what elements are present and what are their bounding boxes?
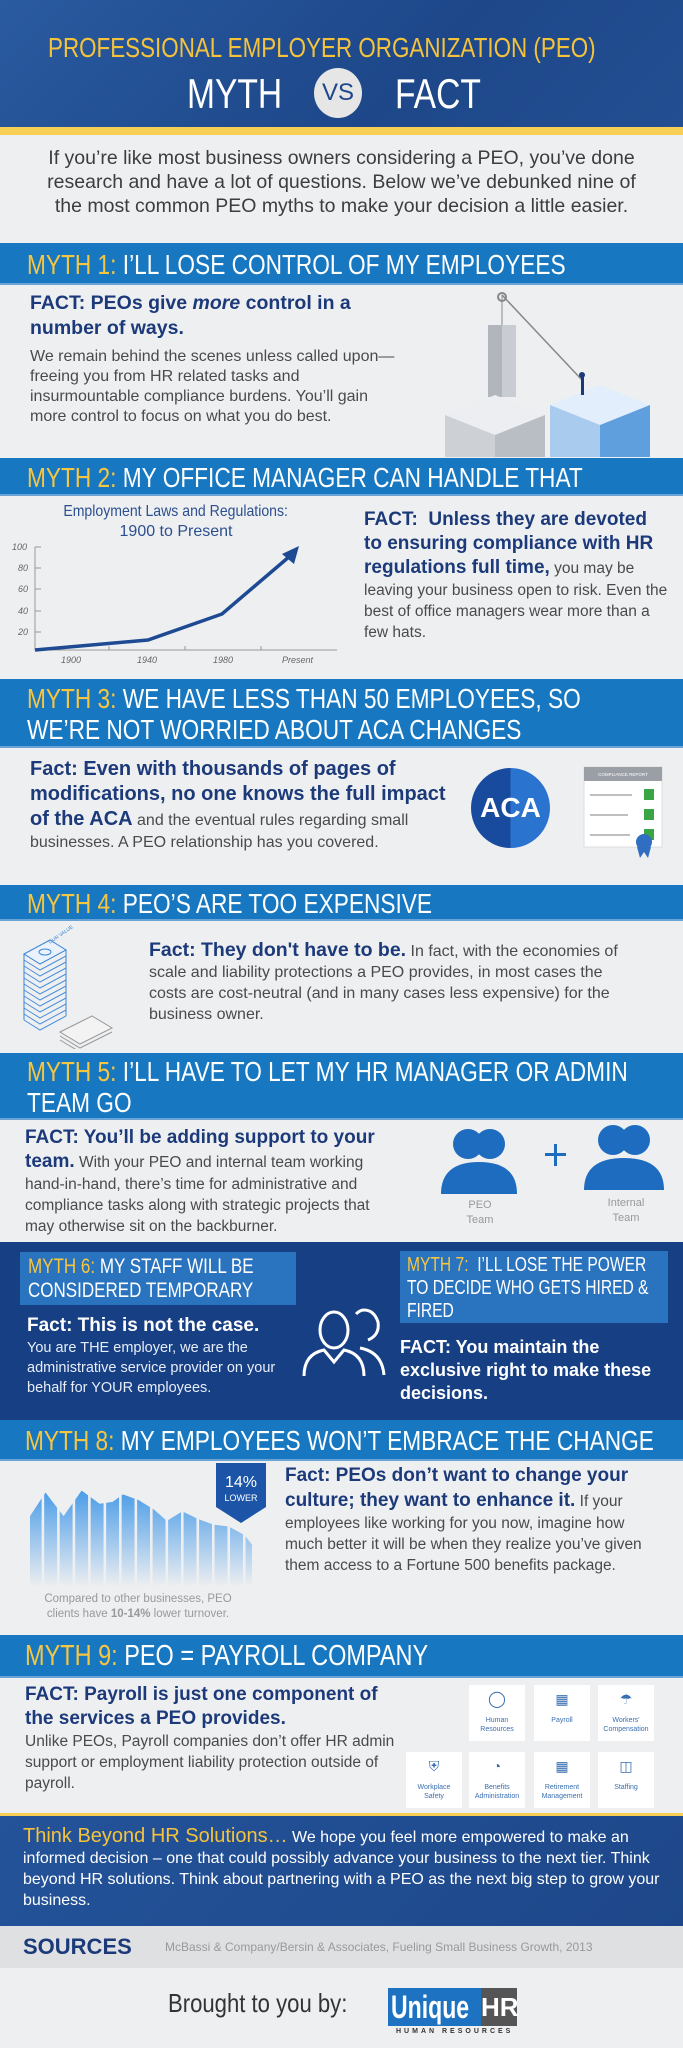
myth 8 header: MYTH 8: MY EMPLOYEES WON’T EMBRACE THE CHANGE	[25, 1425, 654, 1456]
myth 5 header	[0, 1053, 683, 1120]
myth vs fact: VS	[322, 79, 354, 106]
chart: employment laws: Employment Laws and Regulations:	[64, 503, 288, 520]
myth 9 fact	[25, 1684, 394, 1792]
myth 1 fact: FACT: PEOs give more control in a number of ways.	[30, 292, 351, 339]
myth 4 header: MYTH 4: PEO’S ARE TOO EXPENSIVE	[27, 888, 432, 919]
myth vs fact	[187, 68, 481, 118]
myth 2 header	[0, 458, 683, 496]
myth 6 fact	[27, 1315, 275, 1396]
chart: employment laws: 1900	[61, 655, 81, 665]
chart: turnover bars	[30, 1490, 252, 1582]
service tiles: Administration	[475, 1793, 519, 1800]
service tiles: ▦	[555, 1758, 569, 1774]
service tiles: Workers'	[612, 1717, 640, 1724]
closing panel: think beyond: Think Beyond HR Solutions… We hope you feel more empowered to make an informed decision – one that could possibly advance your business to the next tier. Think beyond HR solutions. Think about partnering with a PEO as the next big step to grow your business.	[23, 1825, 660, 1909]
badge: 14% lower	[216, 1463, 266, 1523]
icon: PEO team + internal team: Team	[467, 1214, 493, 1226]
myth 1 header: MYTH 1: I’LL LOSE CONTROL OF MY EMPLOYEES	[27, 249, 566, 280]
service tiles: Staffing	[614, 1784, 638, 1791]
badge: 14% lower: 14%	[225, 1474, 257, 1491]
icon: compliance report: COMPLIANCE REPORT	[598, 772, 648, 777]
chart: employment laws: 80	[18, 563, 28, 573]
myth 3 header: MYTH 3: WE HAVE LESS THAN 50 EMPLOYEES, SO	[27, 683, 581, 714]
sources: SOURCES	[23, 1934, 132, 1959]
myth 6 fact: You are THE employer, we are the administrative service provider on your behalf for YOUR employees.	[27, 1340, 275, 1396]
sources: McBassi & Company/Bersin & Associates, Fueling Small Business Growth, 2013	[165, 1940, 593, 1954]
service tiles: ⛨	[429, 1758, 439, 1774]
myth 7 header box	[400, 1251, 668, 1323]
chart: employment laws: 1980	[213, 655, 233, 665]
brought to you by: Brought to you by:	[168, 1988, 347, 2018]
logo: Unique HR	[388, 1988, 519, 2035]
icon: PEO team + internal team: Team	[613, 1212, 639, 1224]
myth 5 header: MYTH 5: I’LL HAVE TO LET MY HR MANAGER OR ADMIN	[27, 1056, 628, 1087]
myth 7 header box: TO DECIDE WHO GETS HIRED &	[407, 1277, 649, 1299]
service tiles	[406, 1685, 654, 1808]
myth 6 fact: Fact: This is not the case.	[27, 1315, 259, 1336]
service tiles: Safety	[424, 1793, 444, 1800]
service tiles: Human	[486, 1717, 508, 1724]
chart: employment laws: 40	[18, 606, 28, 616]
myth 3 header	[0, 679, 683, 748]
myth 6 header box	[20, 1252, 296, 1305]
header banner	[0, 0, 683, 127]
service tiles: ◫	[619, 1758, 633, 1774]
chart: employment laws: 20	[17, 627, 28, 637]
icon: PEO team + internal team: Internal	[608, 1197, 644, 1209]
myth 3 fact: Fact: Even with thousands of pages of modifications, no one knows the full impact of the ACA and the eventual rules regarding small businesses. A PEO relationship has you covered.	[30, 758, 446, 851]
myth 6 header box: MYTH 6: MY STAFF WILL BE	[28, 1255, 254, 1278]
sources	[0, 1926, 683, 1968]
service tiles: Payroll	[551, 1717, 573, 1724]
closing panel: think beyond	[0, 1813, 683, 1926]
icon: compliance report	[584, 766, 662, 858]
badge: 14% lower: LOWER	[224, 1493, 258, 1503]
service tiles: ▦	[555, 1691, 569, 1707]
myth 8 header	[0, 1420, 683, 1461]
chart: employment laws: 100	[12, 542, 27, 552]
myth 9 fact: FACT: Payroll is just one component of the services a PEO provides.	[25, 1684, 378, 1729]
chart: employment laws: 1940	[137, 655, 157, 665]
chart caption: Compared to other businesses, PEO clients have 10-14% lower turnover.	[44, 1593, 232, 1620]
service tiles: ◯	[488, 1691, 506, 1708]
logo: Unique HR: Unique	[391, 1989, 469, 2025]
service tiles: Retirement	[545, 1784, 579, 1791]
chart: employment laws: 1900 to Present	[120, 523, 232, 540]
myth 7 header box: MYTH 7: I’LL LOSE THE POWER	[407, 1254, 646, 1276]
myth 4 fact: Fact: They don't have to be. In fact, with the economies of scale and liability protections a PEO provides, in most cases the costs are cost-neutral (and in many cases less expensive) for the business owner.	[149, 939, 618, 1023]
icon: money stacks	[23, 924, 113, 1049]
logo: Unique HR: HR	[481, 1992, 519, 2022]
myth 9 fact: Unlike PEOs, Payroll companies don’t offer HR admin support or employment liability protection outside of payroll.	[25, 1733, 394, 1792]
icon: people outline	[302, 1308, 386, 1376]
icon: ACA circle: ACA	[480, 792, 541, 823]
myth 9 header	[0, 1635, 683, 1678]
myth 3 header: WE’RE NOT WORRIED ABOUT ACA CHANGES	[27, 714, 521, 745]
myth 4 header	[0, 885, 683, 921]
myth 7 header box: FIRED	[407, 1300, 454, 1322]
panel: myths 6 and 7	[0, 1242, 683, 1420]
myth 8 fact: Fact: PEOs don’t want to change your culture; they want to enhance it. If your employees like working for you now, imagine how much better it will be when they realize you’ve given them access to a Fortune 500 benefits package.	[285, 1465, 642, 1574]
service tiles: Benefits	[484, 1784, 510, 1791]
illustration: blocks and pulley	[445, 292, 650, 457]
icon: ACA circle	[471, 768, 550, 848]
myth 9 header: MYTH 9: PEO = PAYROLL COMPANY	[25, 1640, 428, 1672]
myth 1 header	[0, 243, 683, 285]
myth 1 fact: We remain behind the scenes unless called upon— freeing you from HR related tasks and insurmountable compliance burdens. You’ll gain more control to focus on what you do best.	[30, 348, 394, 425]
myth 2 fact: FACT: Unless they are devoted to ensuring compliance with HR regulations full time, you may be leaving your business open to risk. Even the best of office managers wear more than a few hats.	[364, 509, 667, 641]
service tiles: Management	[542, 1793, 582, 1800]
myth 2 header: MYTH 2: MY OFFICE MANAGER CAN HANDLE THAT	[27, 462, 583, 493]
myth 1 fact	[30, 292, 394, 425]
chart: employment laws: 60	[18, 584, 28, 594]
title: PROFESSIONAL EMPLOYER ORGANIZATION (PEO)	[48, 32, 596, 63]
service tiles: Workplace	[418, 1784, 450, 1791]
service tiles: Compensation	[603, 1726, 649, 1733]
logo: Unique HR: HUMAN RESOURCES	[396, 2028, 513, 2035]
icon: money stacks: OUR VALUE	[48, 924, 75, 946]
myth 7 fact: FACT: You maintain the exclusive right to make these decisions.	[400, 1337, 651, 1403]
myth vs fact: FACT	[395, 70, 481, 117]
icon: PEO team + internal team	[441, 1125, 664, 1226]
service tiles: ☂	[620, 1691, 632, 1707]
service tiles: ◔	[493, 1758, 501, 1774]
chart: employment laws	[12, 503, 337, 665]
service tiles: Resources	[480, 1726, 514, 1733]
intro text: If you’re like most business owners considering a PEO, you’ve done research and have a lot of questions. Below we’ve debunked nine of the most common PEO myths to make your decision a little easier.	[47, 147, 636, 217]
myth 5 header: TEAM GO	[27, 1087, 132, 1118]
myth vs fact: MYTH	[187, 70, 282, 117]
chart: employment laws: Present	[282, 655, 314, 665]
myth 6 header box: CONSIDERED TEMPORARY	[28, 1279, 253, 1302]
icon: PEO team + internal team: PEO	[468, 1199, 492, 1211]
myth 5 fact: FACT: You’ll be adding support to your team. With your PEO and internal team working hand-in-hand, there’s time for administrative and compliance tasks along with strategic projects that may otherwise sit on the backburner.	[25, 1127, 375, 1235]
